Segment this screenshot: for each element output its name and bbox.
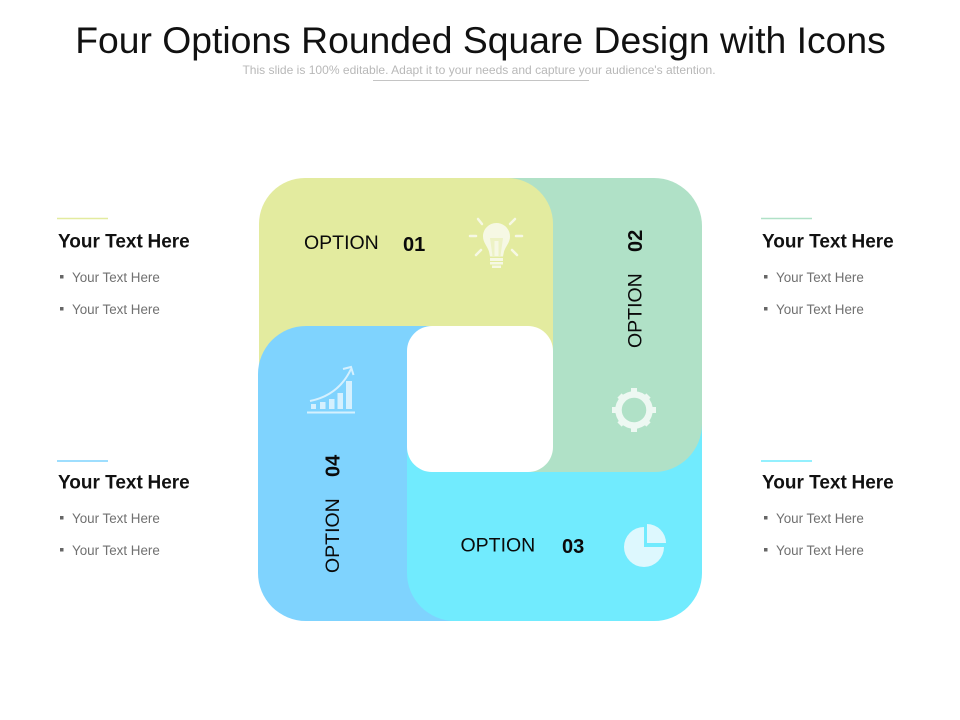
panel: option 04 blue (258, 326, 553, 621)
text block: bottom left (57, 461, 190, 558)
text block: bottom right: Here (852, 472, 894, 494)
option 01 label (304, 232, 425, 256)
option 04 label: OPTION (322, 498, 344, 573)
panel: rounded square diagram (258, 178, 702, 621)
text block: top left: Your Text (58, 232, 143, 252)
text block: top right (761, 218, 894, 317)
icon: light bulb (470, 219, 522, 268)
panel: option 01 yellow overlap (500, 178, 553, 349)
text block: bottom right: Your Text Here (776, 543, 864, 558)
panel: option 01 yellow (259, 178, 553, 472)
panel: center white square (407, 326, 553, 472)
title: Four Options Rounded Square Design with Icons (75, 19, 886, 61)
text block: top left (57, 218, 190, 317)
text block: top left: Your Text Here (72, 302, 160, 317)
text block: top right: Here (852, 232, 894, 252)
panel: option 02 green (500, 178, 702, 472)
text block: top right: Your Text (762, 232, 847, 252)
text block: bottom left: Your Text Here (72, 511, 160, 526)
icon: gear (612, 388, 656, 432)
text block: bottom right: Your Text (762, 472, 847, 494)
option 04 label (322, 454, 344, 573)
option 03 label (460, 534, 584, 558)
option 02 label: 02 (625, 230, 647, 252)
option 03 label: 03 (562, 536, 584, 558)
option 02 label (624, 230, 647, 348)
panel: option 03 cyan (407, 326, 702, 621)
text block: bottom right: Your Text Here (776, 511, 864, 526)
option 04 label: 04 (322, 454, 344, 477)
text block: top right: Your Text Here (776, 302, 864, 317)
icon: pie chart (624, 524, 666, 567)
text block: top left: Your Text Here (72, 270, 160, 285)
text block: top left: Here (148, 232, 190, 252)
text block: bottom left: Your Text (58, 472, 143, 494)
text block: bottom left: Your Text Here (72, 543, 160, 558)
option 01 label: OPTION (304, 232, 379, 254)
option 01 label: 01 (403, 234, 425, 256)
subtitle: This slide is 100% editable. Adapt it to your needs and capture your audience's attention. (242, 63, 716, 77)
icon: growth chart (307, 367, 355, 414)
text block: bottom left: Here (148, 472, 190, 494)
option 03 label: OPTION (460, 534, 535, 556)
option 02 label: OPTION (624, 273, 646, 348)
text block: top right: Your Text Here (776, 270, 864, 285)
text block: bottom right (761, 461, 894, 558)
